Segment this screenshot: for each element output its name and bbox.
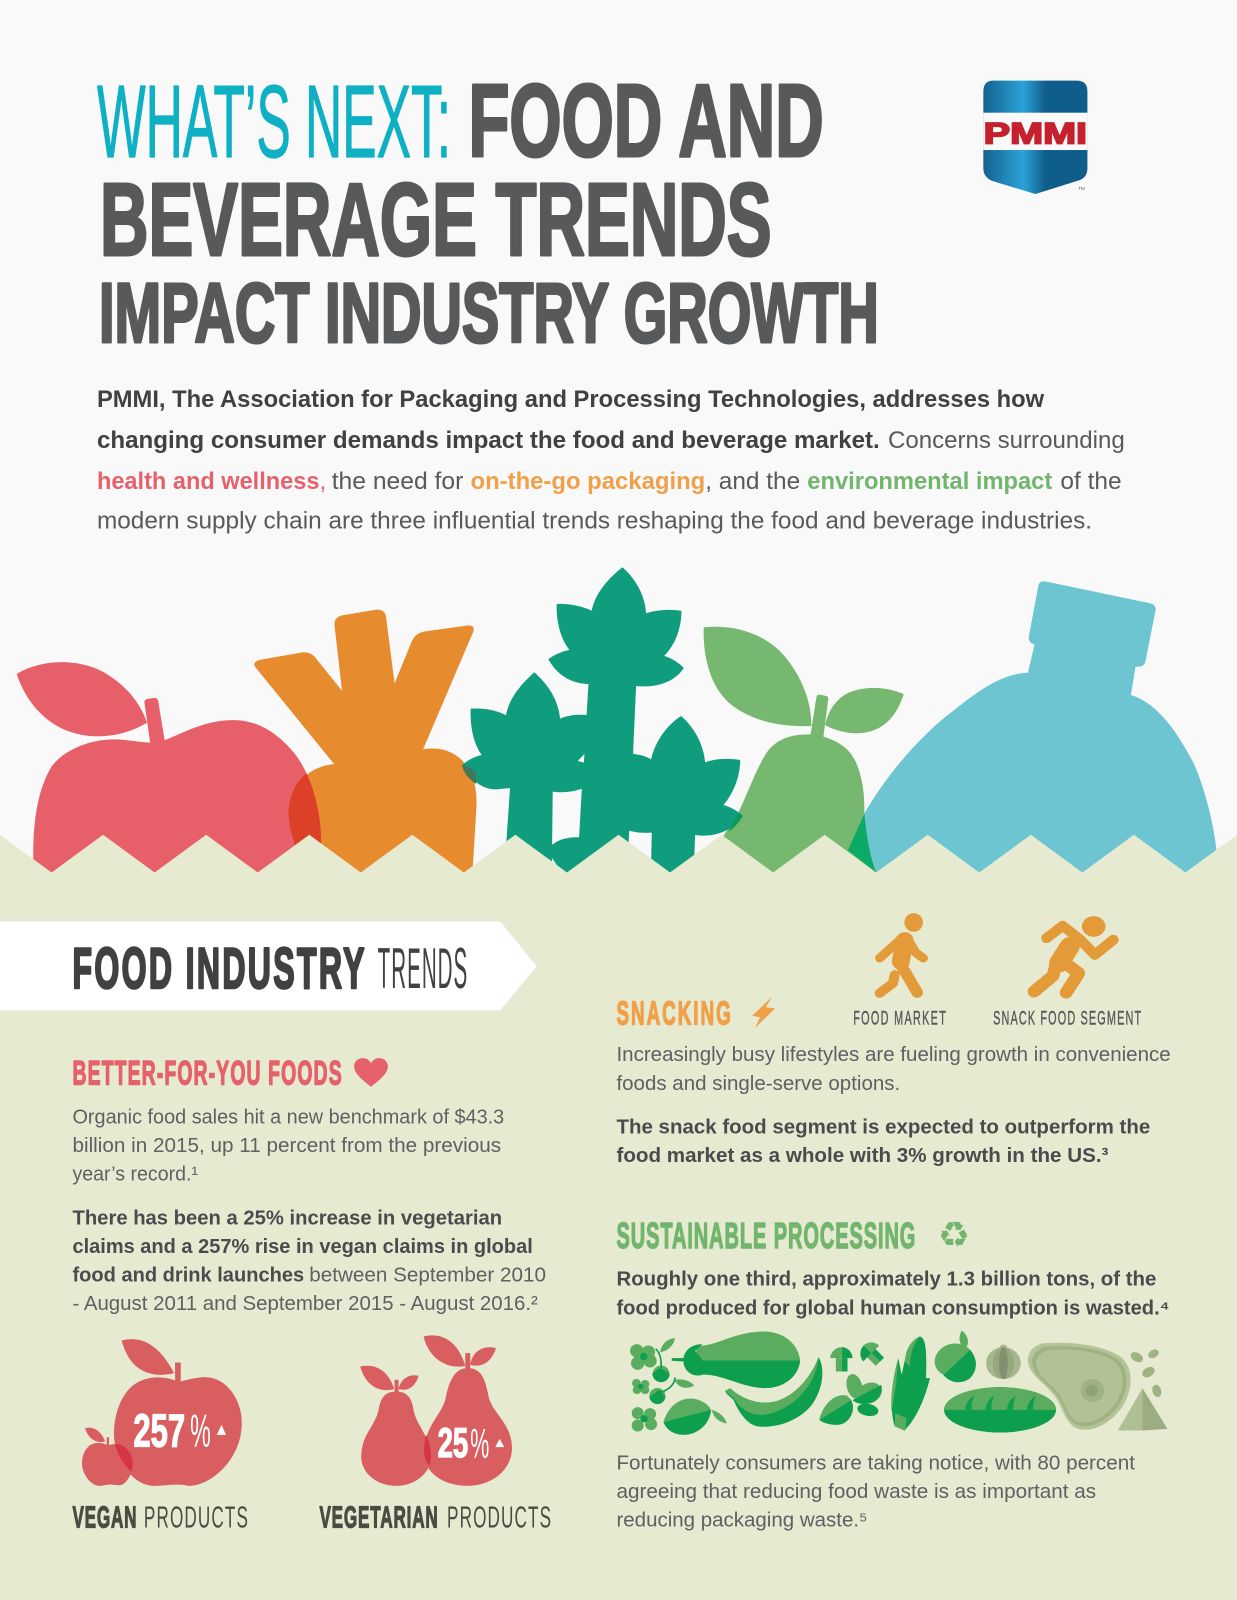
body text: The snack food segment is expected to outperform the	[616, 1117, 1150, 1139]
panel: snacking	[616, 913, 1171, 1167]
body text: - August 2011 and September 2015 - August 2016.²	[72, 1293, 538, 1315]
icon: running figure	[1034, 916, 1113, 993]
logo: PMMI shield: TM	[1078, 186, 1085, 191]
illustration: food waste row, fruit and vegetables	[630, 1331, 888, 1435]
icon: lightning bolt	[752, 997, 775, 1028]
body text: between September 2010	[309, 1265, 546, 1287]
chart: vegan products apples	[82, 1339, 242, 1486]
logo: PMMI shield: PMMI	[984, 117, 1087, 150]
chart: vegetarian products pears: 25	[438, 1419, 468, 1466]
title: WHAT’S NEXT:	[97, 64, 451, 179]
heading: snacking: SNACKING	[616, 994, 731, 1032]
intro text	[97, 386, 1125, 535]
body text: food and drink launches	[72, 1265, 304, 1287]
intro text: on-the-go packaging	[471, 468, 705, 495]
body text: billion in 2015, up 11 percent from the previous	[72, 1135, 501, 1157]
illustration: pear	[704, 627, 904, 873]
intro text: modern supply chain are three influential trends reshaping the food and beverage industries.	[97, 508, 1092, 535]
heading: better-for-you foods: BETTER-FOR-YOU FOODS	[72, 1054, 342, 1092]
panel: better-for-you foods	[72, 1054, 546, 1315]
illustration: carrot	[254, 610, 477, 873]
chart: vegetarian products pears: %	[470, 1420, 489, 1467]
body text: agreeing that reducing food waste is as important as	[616, 1481, 1096, 1503]
label: vegetarian products	[319, 1502, 551, 1535]
label: vegan products: PRODUCTS	[144, 1502, 248, 1535]
body text: Increasingly busy lifestyles are fueling growth in convenience	[616, 1044, 1171, 1066]
zigzag green background	[0, 835, 1237, 1600]
body text: There has been a 25% increase in vegetarian	[72, 1207, 502, 1229]
intro text: of the	[1060, 468, 1122, 495]
panel: sustainable processing	[616, 1215, 1170, 1532]
label: food market: FOOD MARKET	[853, 1008, 946, 1029]
banner: food industry trends: FOOD INDUSTRY	[72, 936, 365, 1000]
title: FOOD AND	[468, 63, 824, 178]
illustration: food waste row, corn, bread and protein	[891, 1330, 1167, 1433]
chart: vegetarian products pears	[360, 1335, 512, 1486]
label: vegetarian products: VEGETARIAN	[319, 1502, 438, 1535]
icon: recycle: ♻	[938, 1215, 970, 1256]
intro text: , and the	[705, 468, 800, 495]
body text	[616, 1269, 1170, 1319]
body text	[72, 1106, 546, 1315]
icon: walking figure	[880, 913, 923, 993]
label: vegetarian products: PRODUCTS	[447, 1502, 551, 1535]
label: vegan products: VEGAN	[72, 1502, 136, 1535]
body text: Roughly one third, approximately 1.3 billion tons, of the	[616, 1269, 1156, 1291]
title: BEVERAGE TRENDS	[100, 162, 772, 277]
illustration: apple	[17, 662, 321, 873]
title	[97, 63, 879, 360]
intro text: Concerns surrounding	[888, 427, 1125, 454]
label: vegan products	[72, 1502, 248, 1535]
banner: food industry trends: TRENDS	[378, 937, 467, 1001]
label: snack food segment: SNACK FOOD SEGMENT	[993, 1008, 1141, 1029]
chart: vegan products apples: 257	[133, 1405, 185, 1457]
body text: claims and a 257% rise in vegan claims in global	[72, 1236, 533, 1258]
illustration: leafy greens	[462, 567, 743, 880]
body text: reducing packaging waste.⁵	[616, 1510, 868, 1532]
body text: year’s record.¹	[72, 1164, 198, 1186]
logo: PMMI shield	[983, 81, 1087, 194]
body text	[616, 1452, 1135, 1532]
intro text: ,	[319, 468, 326, 495]
body text: food market as a whole with 3% growth in the US.³	[616, 1145, 1109, 1167]
intro text: PMMI, The Association for Packaging and Processing Technologies, addresses how	[97, 386, 1045, 413]
body text	[616, 1044, 1171, 1167]
banner: food industry trends	[0, 921, 537, 1010]
body text: Organic food sales hit a new benchmark of $43.3	[72, 1106, 504, 1128]
body text: foods and single-serve options.	[616, 1073, 900, 1095]
illustration: bottle	[848, 581, 1217, 873]
intro text: health and wellness	[97, 468, 319, 495]
intro text: changing consumer demands impact the food and beverage market.	[97, 427, 880, 454]
icon: heart	[354, 1058, 388, 1087]
body text: Fortunately consumers are taking notice, with 80 percent	[616, 1452, 1135, 1474]
intro text: the need for	[332, 468, 463, 495]
body text: food produced for global human consumption is wasted.⁴	[616, 1297, 1170, 1319]
intro text: environmental impact	[807, 468, 1052, 495]
heading: sustainable processing: SUSTAINABLE PROCESSING	[616, 1217, 915, 1257]
chart: vegan products apples: %	[190, 1405, 211, 1457]
